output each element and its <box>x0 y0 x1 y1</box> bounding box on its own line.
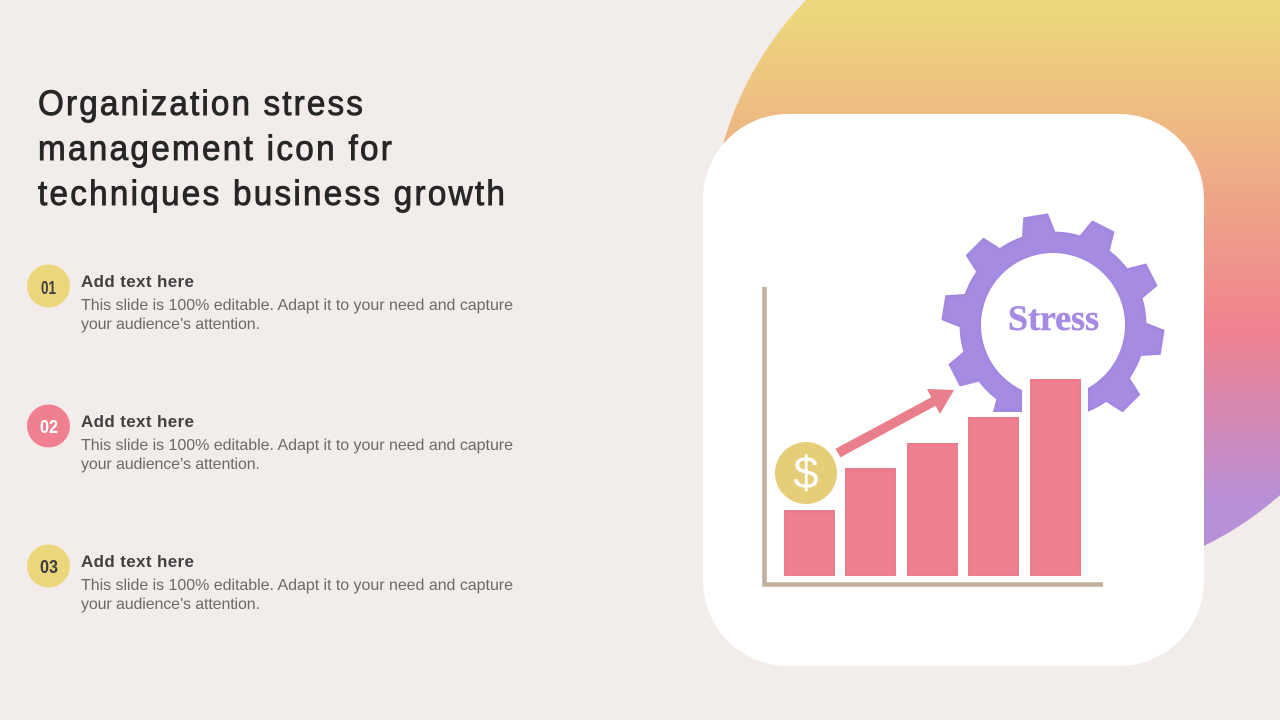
item 03 text: your audience’s attention. <box>81 596 260 613</box>
item 01 text: your audience’s attention. <box>81 316 260 333</box>
list item 01 <box>27 264 513 333</box>
title <box>38 84 505 213</box>
item 02 text: your audience’s attention. <box>81 456 260 473</box>
badge 02 <box>27 404 70 448</box>
title: Organization stress <box>38 84 363 123</box>
bar chart <box>784 379 1081 576</box>
gear label: Stress: Stress <box>1008 298 1099 338</box>
item 02 text: This slide is 100% editable. Adapt it to your need and capture <box>81 437 513 454</box>
icon: dollar coin: $ <box>793 447 819 498</box>
background gradient blob <box>710 0 1280 581</box>
chart axes <box>764 287 1103 584</box>
badge 03 <box>27 544 70 588</box>
list item 02 <box>27 404 513 473</box>
icon: dollar coin <box>775 442 837 504</box>
item 01 text: Add text here <box>81 272 194 291</box>
title: management icon for <box>38 129 392 168</box>
item 03 text: This slide is 100% editable. Adapt it to your need and capture <box>81 577 513 594</box>
title: techniques business growth <box>38 174 505 213</box>
icon: gear <box>941 213 1165 432</box>
badge 03: 03 <box>40 557 58 577</box>
arrow <box>836 389 954 457</box>
item 01 text <box>81 272 513 333</box>
item 03 text: Add text here <box>81 552 194 571</box>
item 01 text: This slide is 100% editable. Adapt it to your need and capture <box>81 297 513 314</box>
badge 01: 01 <box>41 278 56 298</box>
badge 01 <box>27 264 70 308</box>
item 02 text: Add text here <box>81 412 194 431</box>
badge 02: 02 <box>40 417 58 437</box>
panel: white card <box>703 114 1204 666</box>
item 02 text <box>81 412 513 473</box>
list item 03 <box>27 544 513 613</box>
item 03 text <box>81 552 513 613</box>
